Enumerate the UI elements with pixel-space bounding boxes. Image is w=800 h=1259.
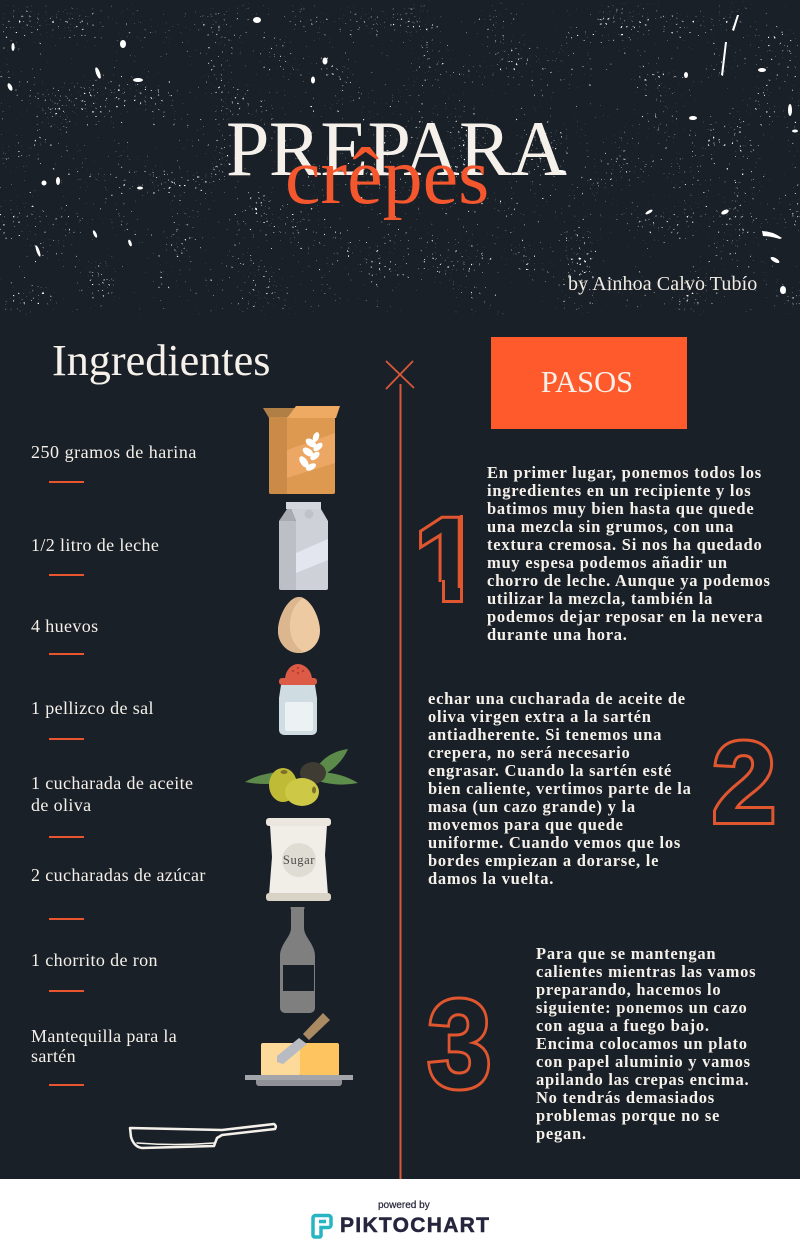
step 1 text: una mezcla sin grumos, con una bbox=[487, 517, 734, 536]
icon: salt shaker bbox=[279, 664, 317, 735]
ingredient: mantequilla: sartén bbox=[31, 1046, 76, 1066]
centre divider line bbox=[400, 384, 402, 1179]
icon: sugar bag bbox=[266, 818, 331, 901]
step 1 text: chorro de leche. Aunque ya podemos bbox=[487, 571, 771, 590]
footer bbox=[0, 1179, 800, 1259]
step 2 text: masa (un cazo grande) y la bbox=[428, 797, 636, 816]
step 2 text bbox=[428, 689, 692, 888]
step 3 text: Encima colocamos un plato bbox=[536, 1034, 748, 1053]
ingredient: harina: 250 gramos de harina bbox=[31, 442, 197, 462]
number 3: 3 bbox=[428, 975, 491, 1114]
Piktochart wordmark: PIKTOCHART bbox=[340, 1214, 490, 1237]
step 1 text: ingredientes en un recipiente y los bbox=[487, 481, 751, 500]
step 1 text: batimos muy bien hasta que quede bbox=[487, 499, 754, 518]
PASOS box: PASOS bbox=[541, 365, 633, 399]
ingredient: azúcar: 2 cucharadas de azúcar bbox=[31, 865, 206, 885]
icon: sugar bag: Sugar bbox=[283, 853, 315, 867]
ingredient: leche: 1/2 litro de leche bbox=[31, 535, 159, 555]
step 3 text bbox=[536, 944, 756, 1143]
step 2 text: damos la vuelta. bbox=[428, 869, 554, 888]
step 3 text: pegan. bbox=[536, 1124, 587, 1143]
step 1 text: durante una hora. bbox=[487, 625, 628, 644]
step 1 text: muy espesa podemos añadir un bbox=[487, 553, 728, 572]
step 3 text: apilando las crepas encima. bbox=[536, 1070, 749, 1089]
title: crêpes: crêpes bbox=[285, 133, 489, 221]
step 3 text: problemas porque no se bbox=[536, 1106, 720, 1125]
number 1 bbox=[419, 515, 463, 603]
step 3 text: con papel aluminio y vamos bbox=[536, 1052, 751, 1071]
icon: milk carton bbox=[279, 502, 328, 590]
step 3 text: siguiente: ponemos un cazo bbox=[536, 998, 748, 1017]
title: PREPARA: PREPARA bbox=[226, 105, 566, 192]
icon: rum bottle bbox=[280, 907, 315, 1013]
step 1 text: textura cremosa. Si nos ha quedado bbox=[487, 535, 762, 554]
ingredient: aceite: de oliva bbox=[31, 795, 92, 815]
header speckle texture bbox=[0, 1, 800, 315]
number 1: 1 bbox=[414, 494, 480, 626]
icon: egg bbox=[278, 597, 320, 653]
ingredient: mantequilla: Mantequilla para la bbox=[31, 1026, 177, 1046]
step 2 text: oliva virgen extra a la sartén bbox=[428, 707, 652, 726]
ingredient: aceite: 1 cucharada de aceite bbox=[31, 773, 193, 793]
step 3 text: preparando, hacemos lo bbox=[536, 980, 721, 999]
number 2: 2 bbox=[712, 719, 776, 847]
step 3 text: Para que se mantengan bbox=[536, 944, 716, 963]
step 2 text: antiadherente. Si tenemos una bbox=[428, 725, 662, 744]
step 1 text bbox=[487, 463, 771, 644]
icon: butter on dish bbox=[245, 1013, 353, 1086]
ingredient: huevos: 4 huevos bbox=[31, 616, 99, 636]
step 2 text: movemos para que quede bbox=[428, 815, 624, 834]
icon: flour box bbox=[263, 406, 340, 494]
step 2 text: echar una cucharada de aceite de bbox=[428, 689, 686, 708]
step 1 text: podemos dejar reposar en la nevera bbox=[487, 607, 763, 626]
ingredient: ron: 1 chorrito de ron bbox=[31, 950, 158, 970]
icon: frying pan line drawing bbox=[130, 1124, 276, 1148]
ingredient: sal: 1 pellizco de sal bbox=[31, 698, 154, 718]
ingredient: mantequilla bbox=[31, 1026, 177, 1066]
powered by label: powered by bbox=[378, 1200, 430, 1211]
Piktochart logo icon bbox=[311, 1214, 333, 1239]
step 3 text: con agua a fuego bajo. bbox=[536, 1016, 710, 1035]
step 2 text: crepera, no será necesario bbox=[428, 743, 630, 762]
step 2 text: uniforme. Cuando vemos que los bbox=[428, 833, 681, 852]
icons and line art layer bbox=[128, 360, 774, 1179]
byline: by Ainhoa Calvo Tubío bbox=[568, 273, 757, 295]
heading: Ingredientes: Ingredientes bbox=[52, 336, 270, 385]
step 2 text: engrasar. Cuando la sartén esté bbox=[428, 761, 672, 780]
step 1 text: utilizar la mezcla, también la bbox=[487, 589, 713, 608]
step 1 text: En primer lugar, ponemos todos los bbox=[487, 463, 762, 482]
PASOS box bbox=[491, 337, 687, 429]
step 2 text: bien caliente, vertimos parte de la bbox=[428, 779, 692, 798]
step 3 text: calientes mientras las vamos bbox=[536, 962, 756, 981]
ingredient: aceite bbox=[31, 773, 193, 815]
icon: cross marker bbox=[386, 361, 414, 389]
step 2 text: bordes empiezan a dorarse, le bbox=[428, 851, 659, 870]
icon: olives bbox=[245, 749, 358, 806]
step 3 text: No tendrás demasiados bbox=[536, 1088, 715, 1107]
